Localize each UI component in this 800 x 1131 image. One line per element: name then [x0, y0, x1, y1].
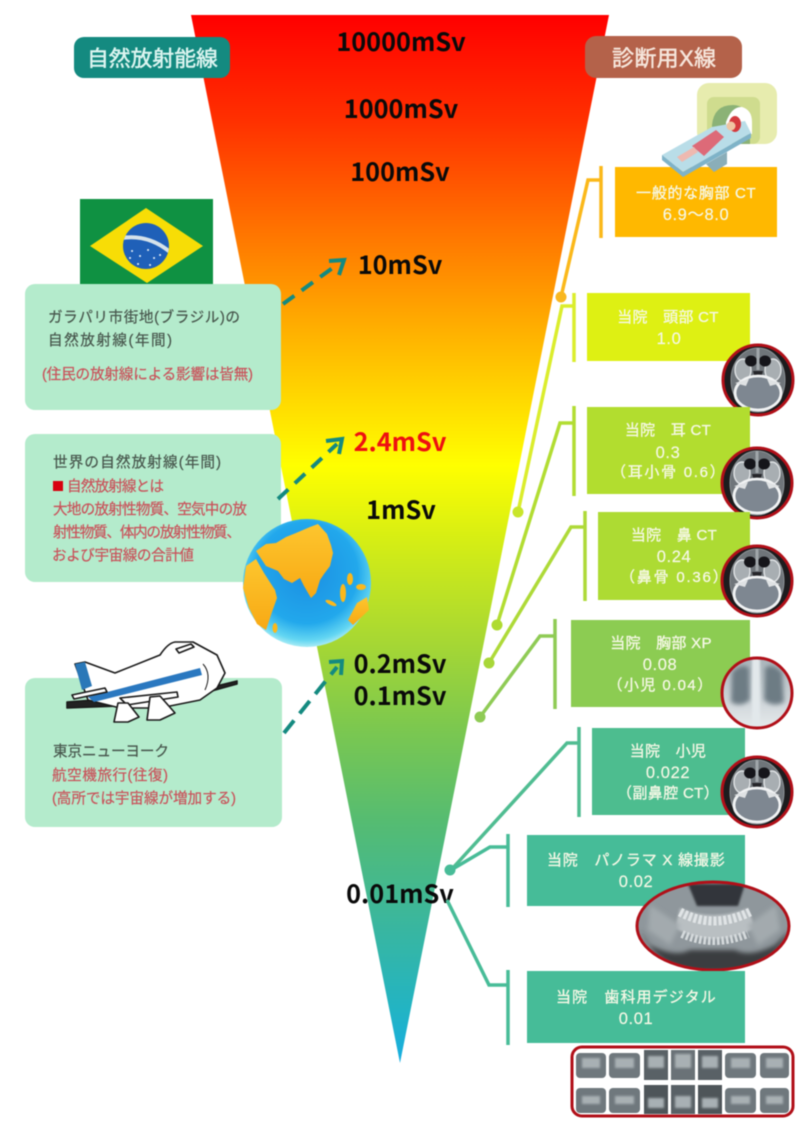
panel: Guarapari: (住民の放射線による影響は皆無): [42, 366, 253, 383]
panel: world natural radiation: 自然放射線とは: [67, 478, 164, 495]
dose scale labels: 0.2mSv: [354, 645, 447, 681]
heading: natural radiation: 自然放射能線: [87, 46, 218, 71]
panel: ear CT: 当院 耳 CT: [625, 422, 711, 439]
panel: chest XP: （小児 0.04）: [608, 677, 712, 694]
panel: Guarapari: ガラパリ市街地(ブラジル)の: [48, 308, 240, 326]
dose scale labels: 10mSv: [358, 246, 443, 282]
panel: Guarapari: 自然放射線(年間): [48, 332, 172, 349]
panel: head CT: 当院 頭部 CT: [617, 309, 719, 326]
panel: dental digital x-ray: 当院 歯科用デジタル: [556, 988, 716, 1006]
dose scale labels: 100mSv: [350, 153, 450, 189]
panel: world natural radiation: [25, 434, 281, 582]
panel: general chest CT: 6.9〜8.0: [663, 206, 729, 224]
image: dental x-ray series: [572, 1047, 793, 1116]
panel: Tokyo New York flight: 航空機旅行(往復): [52, 767, 168, 784]
image: sinus CT scan: [722, 757, 792, 827]
heading: diagnostic x-ray: 診断用X線: [612, 46, 716, 71]
image: nose CT scan: [722, 546, 792, 616]
panel: nose CT: （鼻骨 0.36）: [620, 569, 728, 586]
panel: ear CT: [492, 406, 750, 630]
panel: dental digital x-ray: 0.01: [619, 1010, 653, 1028]
image: chest x-ray: [722, 655, 792, 735]
image: ear CT scan: [722, 448, 792, 518]
panel: child sinus CT: 当院 小児: [630, 743, 706, 760]
arrow: flight to 0.2mSv: [284, 661, 342, 733]
panel: child sinus CT: [451, 727, 745, 870]
dose gradient triangle: [191, 15, 609, 1063]
panel: panoramic x-ray: 0.02: [619, 873, 653, 891]
panel: chest XP: 0.08: [643, 656, 677, 674]
arrow: Guarapari to 10mSv: [283, 260, 344, 304]
panel: head CT: 1.0: [657, 330, 681, 348]
heading: natural radiation: [74, 37, 230, 78]
dose scale labels: 0.01mSv: [346, 875, 454, 911]
dose scale labels: 1mSv: [366, 491, 436, 527]
icon: Brazil flag: [80, 199, 213, 293]
panel: Guarapari: [25, 284, 281, 410]
panel: nose CT: [484, 511, 750, 668]
panel: panoramic x-ray: 当院 パノラマ X 線撮影: [547, 851, 725, 869]
icon: airplane: [67, 642, 237, 722]
panel: ear CT: 0.3: [656, 444, 680, 462]
arrow: world to 2.4mSv: [278, 439, 342, 499]
panel: world natural radiation: 世界の自然放射線(年間): [53, 454, 221, 471]
image: head CT scan: [723, 345, 793, 415]
panel: Tokyo New York flight: [25, 678, 282, 827]
dose scale labels: 10000mSv: [336, 23, 466, 59]
panel: child sinus CT: 0.022: [646, 764, 690, 782]
panel: general chest CT: 一般的な胸部 CT: [636, 185, 756, 202]
panel: nose CT: 当院 鼻 CT: [631, 527, 717, 544]
panel: nose CT: 0.24: [657, 548, 691, 566]
panel: child sinus CT: （副鼻腔 CT）: [617, 785, 719, 802]
heading: diagnostic x-ray: [585, 36, 742, 78]
panel: chest XP: [474, 619, 750, 722]
panel: panoramic x-ray: [444, 834, 745, 907]
panel: world natural radiation: および宇宙線の合計値: [52, 547, 194, 564]
panel: Tokyo New York flight: 東京ニューヨーク: [53, 743, 169, 760]
panel: Tokyo New York flight: (高所では宇宙線が増加する): [52, 790, 236, 807]
panel: head CT: [512, 293, 750, 518]
dose scale labels: 2.4mSv: [354, 423, 447, 459]
dose scale labels: 1000mSv: [344, 90, 459, 126]
dose scale labels: [336, 23, 466, 911]
panel: world natural radiation: 大地の放射性物質、空気中の放: [53, 500, 247, 518]
icon: globe: [243, 519, 371, 647]
icon: CT scanner: [662, 83, 777, 177]
panel: chest XP: 当院 胸部 XP: [610, 635, 712, 652]
dose scale labels: 0.1mSv: [354, 677, 447, 713]
panel: ear CT: （耳小骨 0.6）: [611, 464, 725, 481]
image: panoramic dental x-ray: [637, 882, 790, 972]
panel: world natural radiation: 射性物質、体内の放射性物質、: [53, 523, 241, 541]
panel: general chest CT: [556, 166, 777, 302]
panel: dental digital x-ray: [447, 900, 745, 1045]
